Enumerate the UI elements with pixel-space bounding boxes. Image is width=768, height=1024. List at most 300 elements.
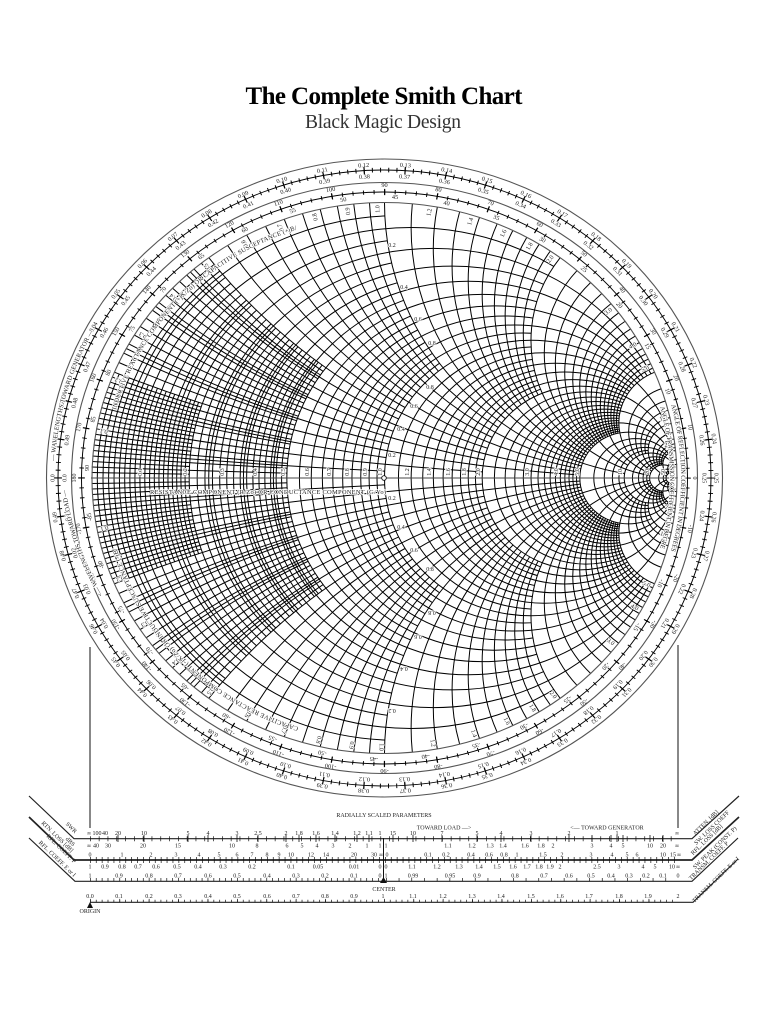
axis resistance labels: 0.9	[363, 468, 369, 476]
return loss and reflection loss labels: 0.1	[424, 852, 432, 858]
angle scale labels: -10	[686, 524, 694, 533]
voltage reflection coefficient labels: 0.2	[321, 874, 329, 880]
power coefficient labels: 0.4	[194, 864, 202, 870]
rim reactance labels: 0.7	[279, 725, 289, 734]
angle scale labels: -170	[75, 523, 84, 535]
voltage reflection coefficient labels: 0.3	[292, 874, 300, 880]
rim reactance labels: 3.0	[603, 307, 614, 317]
scale base lines and diagonals	[29, 796, 739, 902]
wavelength scale labels: 0.23	[689, 547, 699, 559]
wavelengths toward load caption: <— WAVELENGTHS TOWARD LOAD —	[63, 490, 101, 596]
rim reactance labels: 0.6	[243, 709, 253, 719]
power coefficient labels: 1.2	[433, 864, 441, 870]
rim reactance labels	[99, 205, 671, 751]
SWR and attenuation labels: 1.2	[353, 831, 361, 837]
origin scale labels: 1.3	[468, 894, 476, 900]
wavelength scale labels: 0.20	[647, 288, 659, 300]
wavelength scale labels: 0.25	[700, 473, 708, 483]
axis resistance labels: 0.3	[220, 468, 226, 476]
SWR and attenuation labels: 1.4	[331, 831, 339, 837]
dBS and loss coefficient labels: ∞	[675, 844, 679, 850]
axis resistance labels: 2.0	[476, 468, 482, 476]
rim reactance labels: 0.1	[100, 524, 109, 532]
angle scale labels: -70	[144, 645, 155, 656]
power coefficient labels	[88, 864, 680, 870]
left diagonal scale names	[37, 821, 77, 878]
SWR and attenuation labels: 2	[284, 831, 288, 837]
dBS and loss coefficient labels: 20	[660, 844, 666, 850]
dBS and loss coefficient labels: 1.8	[537, 844, 545, 850]
wavelength scale labels: 0.07	[174, 704, 187, 716]
wavelength scale labels: 0.33	[549, 218, 562, 229]
power coefficient labels: 0	[384, 864, 388, 870]
real axis line	[91, 477, 677, 479]
origin scale labels: 0.0	[86, 894, 94, 900]
wavelength scale labels: 0.02	[58, 394, 68, 406]
wavelength tick scale	[58, 170, 711, 786]
wavelength scale labels: 0.37	[400, 787, 411, 794]
angle scale labels: 30	[648, 327, 658, 336]
voltage reflection coefficient labels: 0.4	[263, 874, 271, 880]
wavelength scale labels: 0.13	[400, 162, 411, 169]
origin scale labels: 1.2	[439, 894, 447, 900]
radial scales panel	[29, 796, 741, 915]
rim reactance labels: 5.0	[641, 580, 651, 589]
panel headings: RADIALLY SCALED PARAMETERS	[336, 813, 432, 819]
origin scale labels: 0.9	[350, 894, 358, 900]
power coefficient labels: 2	[558, 864, 562, 870]
angle scale labels: 70	[486, 199, 495, 207]
voltage reflection coefficient labels: 0.7	[174, 874, 182, 880]
wavelength scale labels: 0.12	[358, 162, 369, 169]
angle scale labels: -10	[655, 578, 665, 588]
voltage reflection coefficient labels: 0	[676, 874, 680, 880]
wavelength scale labels: 0.04	[88, 321, 100, 333]
wavelength scale labels: 0.49	[63, 435, 72, 446]
angle scale labels: -40	[421, 752, 430, 760]
voltage reflection coefficient labels: 0.1	[350, 874, 358, 880]
wavelength scale labels: 0.29	[669, 623, 681, 635]
wavelength scale labels: 0.49	[51, 512, 60, 523]
rim reactance labels: 20	[664, 441, 671, 449]
labels along unit resistance and unit reactance lines: 0.4	[397, 525, 405, 531]
right diagonal scale names: ATTEN. [dB]	[692, 810, 720, 837]
wavelength scale labels: 0.43	[166, 713, 180, 725]
panel headings: <— TOWARD GENERATOR	[570, 826, 644, 832]
rim reactance labels: 0.4	[170, 656, 181, 666]
axis resistance labels: 1.2	[405, 468, 411, 476]
title: The Complete Smith Chart	[246, 83, 523, 110]
return loss and reflection loss labels: 5	[626, 852, 628, 858]
angle scale labels: -5	[671, 533, 679, 540]
subtitle: Black Magic Design	[305, 112, 461, 133]
angle scale labels: 15	[643, 342, 652, 351]
voltage reflection coefficient labels: 0.7	[540, 874, 548, 880]
panel headings	[80, 813, 644, 915]
rim reactance labels: 0.6	[240, 239, 250, 248]
panel headings: CENTER	[372, 887, 396, 893]
angle scale labels: 75	[128, 325, 137, 333]
return loss and reflection loss labels: 12	[308, 852, 314, 858]
SWR and attenuation labels: 4	[206, 831, 210, 837]
wavelength scale labels: 0.16	[514, 745, 527, 756]
SWR and attenuation labels: 100	[92, 831, 102, 837]
return loss and reflection loss labels: 8	[266, 852, 268, 858]
origin scale labels: 2	[676, 894, 680, 900]
wavelength scale labels: 0.27	[689, 397, 699, 409]
SWR and attenuation labels: 20	[115, 831, 121, 837]
SWR and attenuation labels: ∞	[675, 831, 679, 837]
wavelength scale labels: 0.07	[166, 231, 180, 243]
power coefficient labels: 0.8	[118, 864, 126, 870]
labels along unit resistance and unit reactance lines: 0.2	[388, 453, 396, 459]
wavelength scale labels: 0.03	[71, 357, 81, 369]
rim reactance labels: 3.0	[605, 637, 616, 647]
centre arrowhead	[380, 877, 387, 883]
wavelength scale labels: 0.34	[514, 200, 527, 211]
return loss and reflection loss labels: ∞	[379, 852, 383, 858]
rim reactance labels: 0.7	[276, 223, 286, 232]
power coefficient labels: 1.6	[509, 864, 517, 870]
angle scale labels: -80	[97, 560, 106, 569]
rim reactance labels: 1.6	[499, 229, 509, 238]
dBS and loss coefficient labels: 5	[300, 844, 304, 850]
return loss and reflection loss labels: 9	[278, 852, 280, 858]
dBS and loss coefficient labels: 3	[590, 844, 594, 850]
voltage reflection coefficient labels: 0.8	[511, 874, 519, 880]
wavelength scale labels: 0.08	[200, 208, 213, 219]
power coefficient labels: 0.7	[134, 864, 142, 870]
wavelength scale labels: 0.0	[49, 474, 56, 482]
wavelength scale labels: 0.18	[582, 704, 595, 716]
left diagonal scale names: RTN. LOSS [dB]	[40, 821, 74, 854]
power coefficient labels: 0.3	[219, 864, 227, 870]
dBS and loss coefficient labels: 4	[316, 844, 318, 850]
axis resistance labels: 0.2	[183, 468, 189, 476]
rim reactance labels: 1.0	[377, 743, 385, 751]
reflection angle caption: ANGLE OF REFLECTION COEFFICIENT IN DEGREES	[671, 405, 686, 552]
rim reactance labels: 1.0	[374, 205, 382, 213]
origin scale labels: 0.2	[145, 894, 153, 900]
wavelength scale labels: 0.21	[659, 617, 670, 629]
voltage reflection coefficient labels: 0	[378, 874, 382, 880]
return loss and reflection loss labels: 0	[386, 852, 388, 858]
angle scale labels: 90	[381, 182, 388, 189]
SWR and attenuation labels: 1.8	[295, 831, 303, 837]
left drop line	[89, 647, 91, 828]
wavelength scale labels: 0.40	[276, 771, 288, 780]
origin scale labels: 0.1	[115, 894, 123, 900]
constant resistance circles	[97, 205, 677, 751]
labels along unit resistance and unit reactance lines	[388, 243, 436, 713]
angle scale labels: -20	[600, 661, 611, 671]
SWR and attenuation labels	[87, 831, 679, 837]
wavelength scale labels: 0.45	[120, 295, 132, 307]
axis resistance labels: 0.4	[253, 468, 259, 476]
wavelength scale labels: 0.08	[207, 727, 220, 738]
left diagonal scale names: SWR	[64, 822, 77, 835]
power coefficient labels: 0.2	[248, 864, 256, 870]
rim reactance labels: 0.1	[99, 427, 108, 435]
labels along unit resistance and unit reactance lines: 0.2	[388, 496, 396, 502]
right diagonal scale names: SW. PEAK (CONST. P)	[692, 825, 738, 871]
origin scale labels: 0.8	[321, 894, 329, 900]
right diagonal scale names: RFL. LOSS [dB]	[690, 824, 724, 857]
wavelength scale labels: 0.05	[120, 649, 132, 661]
dBS and loss coefficient labels: ∞	[87, 844, 91, 850]
wavelength scale labels: 0.30	[637, 295, 649, 307]
tick marks	[90, 835, 678, 901]
labels along unit resistance and unit reactance lines: 0.2	[388, 243, 396, 249]
panel headings: ORIGIN	[80, 909, 101, 915]
wavelength scale labels: 0.40	[279, 186, 292, 196]
angle scale labels: 100	[325, 186, 336, 194]
wavelength scale labels: 0.30	[647, 656, 659, 668]
rim reactance labels: 1.6	[501, 716, 511, 726]
capacitive reactance caption: CAPACITIVE REACTANCE COMPONENT (-jX/Zo) OR INDUCTIVE SUSCEPTANCE (-jB/Yo)	[112, 548, 298, 730]
angle scale labels: 60	[240, 226, 250, 235]
return loss and reflection loss labels: 6	[236, 852, 238, 858]
SWR and attenuation labels: 10	[141, 831, 147, 837]
voltage reflection coefficient labels: 0.2	[642, 874, 650, 880]
dBS and loss coefficient labels: 40	[93, 844, 99, 850]
wavelength scale labels: 0.39	[318, 178, 331, 186]
origin scale labels: 1.1	[409, 894, 417, 900]
inductive reactance caption: INDUCTIVE REACTANCE COMPONENT (+jX/Zo) OR CAPACITIVE SUSCEPTANCE (+jB/Yo)	[112, 226, 296, 411]
angle scale labels: -20	[671, 573, 681, 583]
labels along unit resistance and unit reactance lines: 0.6	[410, 404, 418, 410]
return loss and reflection loss labels: 0.4	[467, 852, 475, 858]
angle scale labels: 80	[104, 369, 113, 377]
angle scale labels: 55	[289, 207, 297, 215]
labels along unit resistance and unit reactance lines: 0.4	[397, 427, 405, 433]
dBS and loss coefficient labels: 30	[105, 844, 111, 850]
return loss and reflection loss labels: 1.5	[539, 852, 547, 858]
SWR and attenuation labels: 1	[616, 831, 618, 837]
return loss and reflection loss labels: 14	[323, 852, 329, 858]
angle scale labels: 90	[84, 465, 91, 471]
wavelength scale labels: 0.39	[316, 781, 328, 790]
angle scale labels: -110	[272, 748, 285, 758]
power coefficient labels: 5	[654, 864, 656, 870]
wavelength scale labels: 0.34	[519, 756, 532, 766]
angle scale labels: 150	[111, 326, 122, 337]
angle scale labels: -30	[518, 721, 529, 731]
voltage reflection coefficient labels: 0.9	[473, 874, 481, 880]
rim reactance labels: 20	[664, 504, 671, 512]
angle scale labels: 25	[579, 265, 588, 274]
angle scale labels: 140	[141, 284, 153, 296]
angle scale labels: 5	[675, 437, 683, 441]
SWR and attenuation labels: 1	[378, 831, 382, 837]
wavelength scale labels: 0.37	[399, 173, 410, 181]
power coefficient labels: 1.7	[523, 864, 531, 870]
origin scale labels: 0.4	[204, 894, 212, 900]
SWR and attenuation labels: 2	[568, 831, 570, 837]
wavelength scale labels: 0.19	[620, 258, 633, 270]
dBS and loss coefficient labels: 8	[256, 844, 258, 850]
rim reactance labels: 0.5	[205, 686, 215, 696]
dBS and loss coefficient labels: 20	[140, 844, 146, 850]
wavelength scale labels: 0.32	[582, 240, 595, 252]
voltage reflection coefficient labels: 0.95	[445, 874, 455, 880]
power coefficient labels: 2.5	[593, 864, 601, 870]
wavelength scale labels: 0.15	[481, 176, 493, 185]
wavelength scale labels: 0.21	[669, 321, 681, 333]
wavelength scale labels: 0.47	[82, 361, 93, 373]
return loss and reflection loss labels: 2	[150, 852, 152, 858]
dBS and loss coefficient labels: 1.2	[468, 844, 476, 850]
SWR and attenuation labels: 10	[410, 831, 416, 837]
labels along unit resistance and unit reactance lines: 0.8	[426, 385, 434, 391]
angle scale labels: 70	[159, 286, 168, 295]
angle scale labels: -15	[631, 622, 642, 632]
return loss and reflection loss labels	[88, 852, 681, 858]
wavelength scale labels: 0.14	[438, 770, 451, 778]
wavelength scale labels: 0.01	[63, 510, 72, 521]
panel headings: TOWARD LOAD —>	[417, 826, 472, 832]
angle scale labels: -150	[110, 618, 122, 631]
rim reactance labels: 4.0	[629, 603, 640, 612]
wavelength scale labels: 0.26	[709, 512, 718, 523]
wavelength scale labels: 0.35	[481, 771, 493, 780]
origin arrowhead	[87, 902, 93, 908]
SWR and attenuation labels: 5	[476, 831, 478, 837]
dBS and loss coefficient labels	[87, 844, 679, 850]
power coefficient labels: 10	[669, 864, 675, 870]
origin scale labels: 1.9	[644, 894, 652, 900]
angle scale labels: 85	[89, 416, 98, 423]
dBS and loss coefficient labels: 6	[286, 844, 288, 850]
labels along unit resistance and unit reactance lines: 0.6	[414, 317, 422, 323]
axis resistance labels: 0.7	[327, 468, 333, 476]
angle scale labels: -80	[434, 762, 443, 770]
voltage reflection coefficient labels	[88, 874, 680, 880]
wavelength scale labels: 0.41	[242, 200, 255, 211]
voltage reflection coefficient labels: 1	[384, 874, 388, 880]
wavelength scale labels: 0.45	[110, 656, 122, 668]
axis resistance labels	[138, 468, 667, 476]
angle scale labels: 30	[538, 236, 547, 245]
axis resistance labels: 5.0	[575, 468, 581, 476]
wavelength scale labels: 0.43	[174, 240, 187, 252]
rim reactance labels: 1.4	[469, 729, 478, 738]
dBS and loss coefficient labels: 2	[348, 844, 352, 850]
SWR and attenuation labels: 1.6	[312, 831, 320, 837]
SWR and attenuation labels: 3	[530, 831, 532, 837]
wavelength scale labels: 0.09	[237, 190, 250, 200]
angle scale labels: -50	[578, 697, 589, 707]
angle scale labels: -100	[324, 762, 337, 770]
wavelength scale labels: 0.41	[237, 756, 250, 766]
wavelength scale labels: 0.48	[70, 397, 80, 409]
origin scale labels	[86, 894, 680, 900]
wavelength scale labels: 0.26	[697, 435, 706, 446]
SWR and attenuation labels: 3	[236, 831, 238, 837]
wavelength scale labels: 0.0	[61, 474, 69, 482]
power coefficient labels: 0.9	[101, 864, 109, 870]
wavelength scale labels: 0.22	[688, 357, 698, 369]
dBS and loss coefficient labels: 4	[610, 844, 612, 850]
angle scale labels: -55	[268, 734, 278, 743]
angle scale labels: -30	[648, 619, 658, 629]
power coefficient labels: 1.5	[493, 864, 501, 870]
origin scale labels: 0.7	[292, 894, 300, 900]
voltage reflection coefficient labels: 0.5	[587, 874, 595, 880]
dBS and loss coefficient labels: 10	[229, 844, 235, 850]
axis resistance labels: 4.0	[554, 468, 560, 476]
wavelength scale labels: 0.46	[99, 327, 110, 339]
rim reactance labels: 0.2	[115, 574, 125, 583]
wavelength scale labels: 0.46	[88, 623, 100, 635]
return loss and reflection loss labels: 4	[198, 852, 200, 858]
angle scale labels: -160	[88, 572, 99, 584]
transmission angle caption: ANGLE OF TRANSMISSION COEFFICIENT IN DEGREES	[660, 407, 676, 549]
angle scale labels: -35	[471, 740, 481, 750]
wavelength scale labels: 0.17	[549, 727, 562, 738]
labels along unit resistance and unit reactance lines: 0.4	[400, 665, 408, 671]
angle scale labels: 35	[492, 214, 500, 222]
power coefficient labels: 0.01	[349, 864, 359, 870]
SWR and attenuation labels: 7	[440, 831, 444, 837]
return loss and reflection loss labels: 3	[590, 852, 592, 858]
wavelength scale labels: 0.04	[99, 617, 110, 629]
wavelength scale labels: 0.09	[242, 745, 255, 756]
SWR and attenuation labels: 2.5	[254, 831, 262, 837]
voltage reflection coefficient labels: 0.4	[607, 874, 615, 880]
power coefficient labels: 0.05	[313, 864, 323, 870]
angle scale labels: -140	[141, 660, 154, 672]
axis resistance labels: 1.0	[378, 468, 384, 476]
constant reactance arcs	[92, 202, 678, 754]
labels along unit resistance and unit reactance lines: 0.8	[426, 567, 434, 573]
angle scale labels: 65	[197, 252, 206, 261]
rim reactance labels: 2.0	[545, 254, 556, 264]
angle scale labels: -60	[221, 711, 232, 721]
right diagonal scale names: TRANSM. COEFF. E or I	[692, 856, 741, 904]
power coefficient labels: 0.6	[152, 864, 160, 870]
concentric rings	[46, 159, 722, 797]
wavelength scale labels: 0.33	[556, 737, 569, 748]
rim reactance labels: 4.0	[628, 341, 638, 351]
right diagonal scale names: SW. LOSS COEFF	[694, 810, 732, 847]
angle scale labels: 130	[179, 248, 191, 259]
dBS and loss coefficient labels: 2	[552, 844, 554, 850]
wavelength scale labels: 0.38	[358, 787, 369, 794]
wavelength scale labels: 0.20	[637, 649, 649, 661]
return loss and reflection loss labels: 4	[610, 852, 614, 858]
power coefficient labels: 1.8	[535, 864, 543, 870]
return loss and reflection loss labels: 10	[660, 852, 666, 858]
angle scale labels: -70	[485, 748, 496, 757]
angle scale labels: 0	[678, 486, 685, 490]
origin scale labels: 1.4	[497, 894, 505, 900]
wavelength scale labels: 0.10	[279, 760, 292, 770]
wavelength scale labels: 0.24	[697, 510, 706, 521]
dBS and loss coefficient labels: 1	[378, 844, 382, 850]
power coefficient labels: 1.9	[546, 864, 554, 870]
SWR and attenuation labels: 15	[390, 831, 396, 837]
SWR and attenuation labels: 1.1	[365, 831, 373, 837]
voltage reflection coefficient labels: 0.1	[659, 874, 667, 880]
rim reactance labels: 10	[659, 530, 667, 538]
angle scale labels: -75	[117, 604, 127, 615]
return loss and reflection loss labels: 0	[88, 852, 92, 858]
angle scale labels: 40	[617, 286, 627, 294]
wavelength scale labels: 0.38	[359, 173, 370, 181]
Smith chart impedance grid	[92, 202, 678, 754]
rim reactance labels: 0.9	[347, 741, 355, 749]
